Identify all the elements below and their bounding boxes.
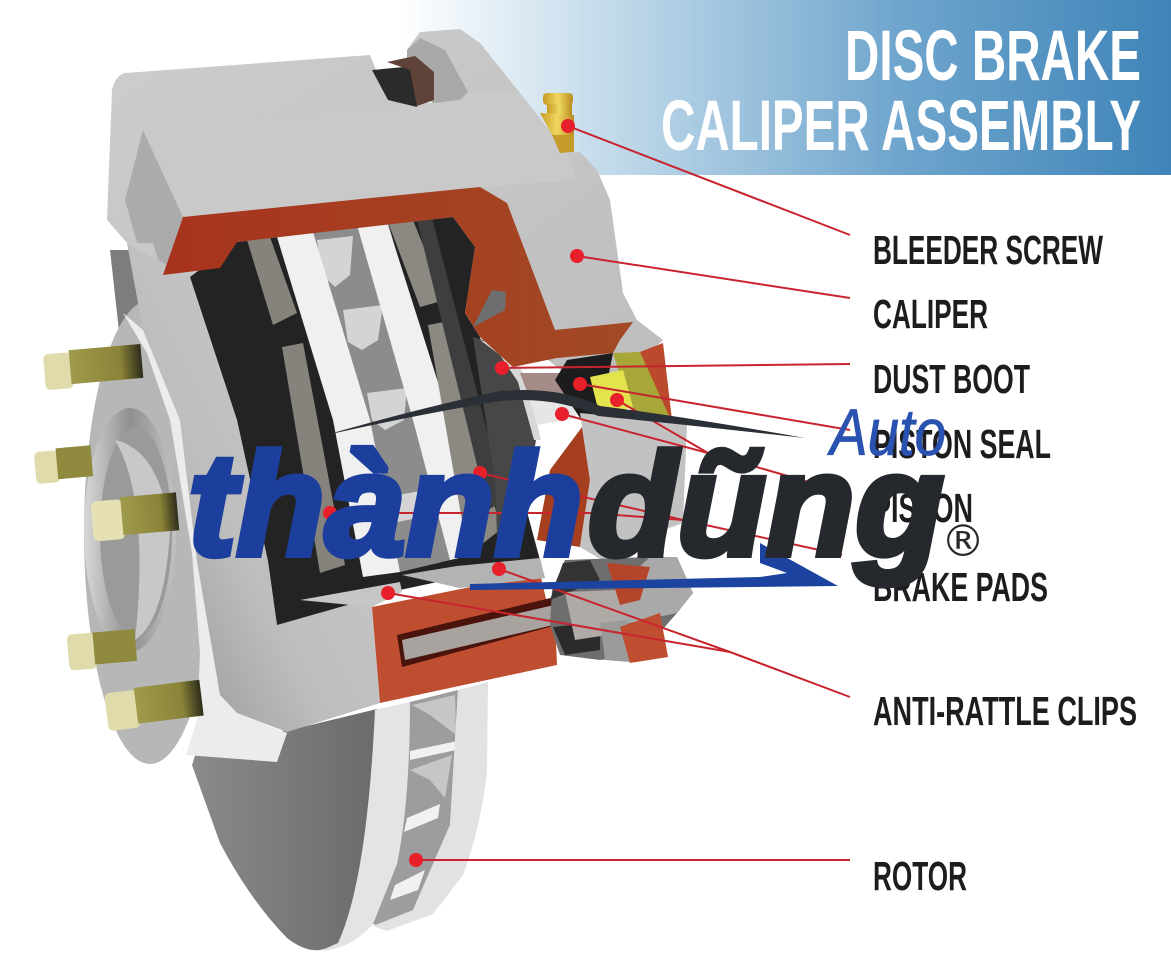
- wheel flange highlight: [123, 313, 287, 762]
- part labels: PISTON: [873, 485, 973, 531]
- callout dots: [323, 119, 624, 867]
- piston and dust boot: [473, 337, 577, 560]
- watermark logo: dũng: [588, 423, 944, 586]
- watermark logo: ®: [941, 516, 985, 567]
- part labels: DUST BOOT: [873, 356, 1030, 402]
- caliper body: [107, 29, 663, 732]
- part labels: CALIPER: [873, 291, 988, 337]
- watermark logo: Auto: [827, 395, 946, 469]
- part labels: BRAKE PADS: [873, 564, 1048, 610]
- brake pads and rotor section: [190, 217, 540, 625]
- rotor: [110, 250, 488, 951]
- caliper lower right: [580, 413, 687, 563]
- piston seal: [555, 352, 670, 418]
- title: [661, 17, 1141, 166]
- part labels: PISTON SEAL: [873, 421, 1051, 467]
- part labels: ROTOR: [873, 853, 967, 899]
- red cut section: [163, 187, 672, 703]
- bleeder screw: [540, 93, 574, 153]
- header banner: [400, 0, 1171, 175]
- watermark logo: thành: [188, 423, 583, 586]
- callout lines: [330, 126, 850, 860]
- hub: [84, 300, 216, 764]
- wheel studs: [34, 344, 204, 731]
- watermark logo: [188, 390, 985, 590]
- part labels: [873, 227, 1137, 899]
- anti-rattle clips and guide pin: [300, 557, 693, 667]
